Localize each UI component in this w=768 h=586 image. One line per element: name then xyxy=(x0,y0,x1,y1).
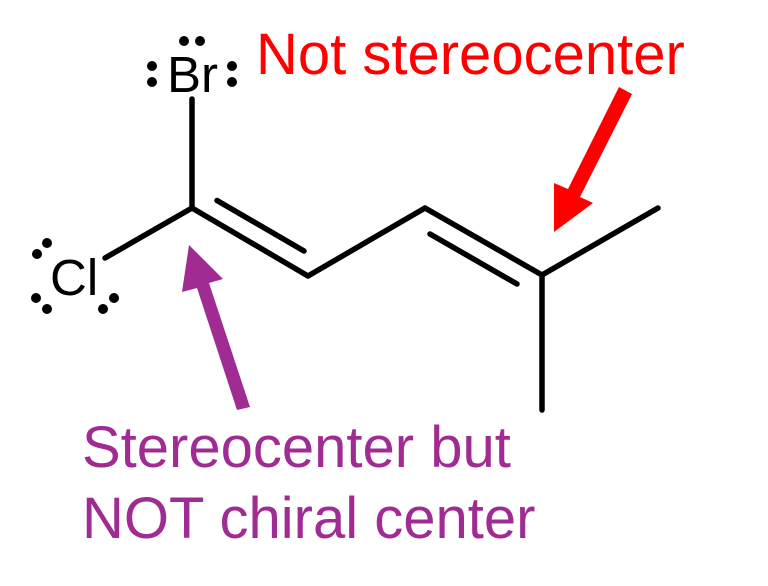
red arrow xyxy=(554,87,632,232)
atom label: Cl: Cl xyxy=(50,249,98,306)
lone pairs on Cl xyxy=(31,238,119,314)
red label: not stereocenter: Not stereocenter xyxy=(256,22,685,87)
lone pairs on Br xyxy=(147,36,237,87)
purple label: stereocenter but not chiral center: NOT chiral center xyxy=(82,486,535,551)
purple arrow xyxy=(182,245,250,410)
purple label: stereocenter but not chiral center xyxy=(82,415,535,551)
atom label: Br: Br xyxy=(167,46,218,103)
purple label: stereocenter but not chiral center: Stereocenter but xyxy=(82,415,511,480)
skeletal bonds xyxy=(105,99,658,410)
